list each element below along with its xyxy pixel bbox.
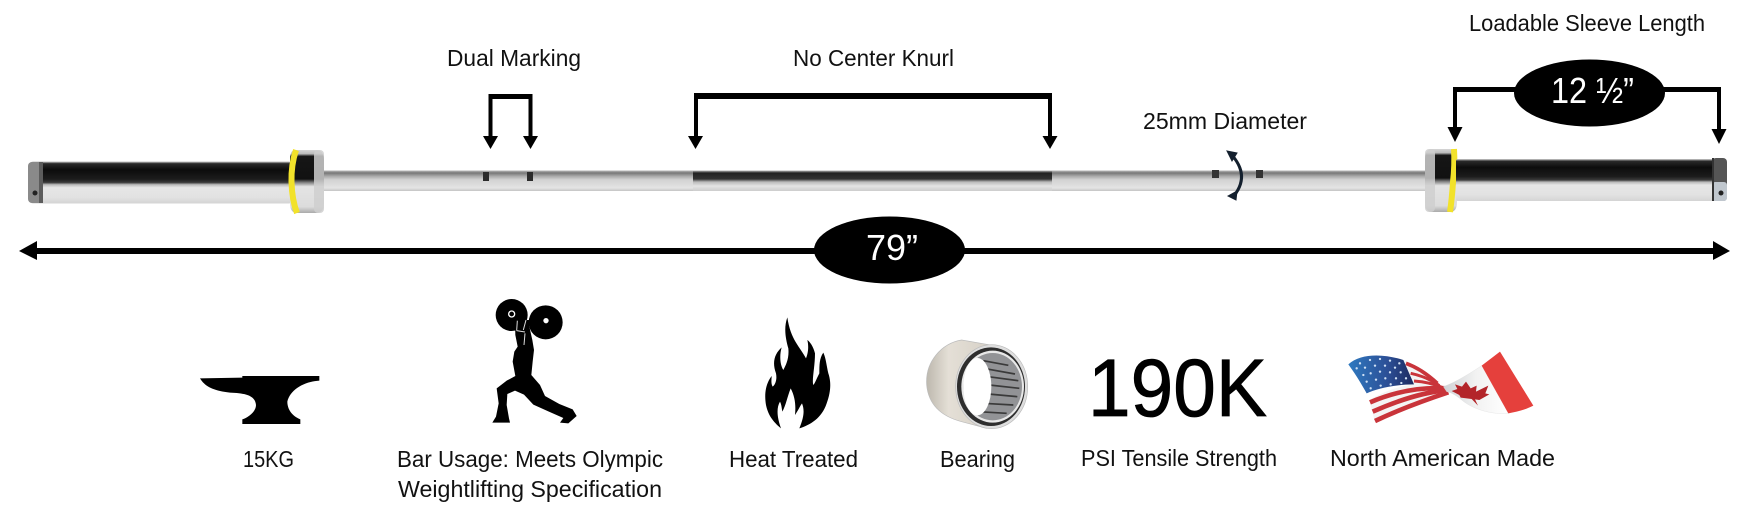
arrows: dual marking bracket bbox=[483, 94, 538, 149]
dual knurl marks left bbox=[483, 172, 533, 181]
left collar bbox=[290, 150, 324, 213]
label: loadable sleeve length: Loadable Sleeve Length bbox=[1469, 10, 1705, 36]
badge: 79 inches bbox=[814, 216, 965, 284]
stat: 190K: 190K bbox=[1088, 343, 1267, 434]
badge: 12 1/2 inches bbox=[1514, 60, 1665, 126]
label: dual marking: Dual Marking bbox=[447, 45, 581, 71]
icon: flame bbox=[765, 317, 830, 428]
left sleeve bbox=[28, 162, 292, 204]
label: no center knurl: No Center Knurl bbox=[793, 45, 954, 71]
centre knurl bbox=[693, 171, 1052, 191]
label: bar usage: Weightlifting Specification bbox=[398, 476, 662, 502]
badge: 79 inches: 79” bbox=[866, 227, 918, 268]
icon: diameter rotation arrow bbox=[1227, 151, 1242, 200]
label: bar usage: Bar Usage: Meets Olympic bbox=[397, 446, 663, 472]
badge: 12 1/2 inches: 12 ½” bbox=[1551, 70, 1634, 111]
shaft bbox=[320, 170, 1430, 191]
icon: anvil bbox=[200, 376, 319, 424]
arrows: sleeve length bracket bbox=[1448, 87, 1726, 144]
dual knurl marks right bbox=[1212, 170, 1263, 178]
barbell bbox=[28, 149, 1727, 213]
right sleeve bbox=[1456, 158, 1727, 201]
label: bar usage bbox=[397, 446, 663, 502]
icon: needle bearing bbox=[927, 340, 1028, 429]
label: bearing: Bearing bbox=[940, 446, 1015, 472]
icon: US and Canadian flags bbox=[1348, 352, 1533, 422]
right collar bbox=[1425, 149, 1457, 212]
label: PSI tensile strength: PSI Tensile Strength bbox=[1081, 445, 1277, 471]
label: heat treated: Heat Treated bbox=[729, 446, 858, 472]
label: north american made: North American Made bbox=[1330, 445, 1555, 471]
arrows: no center knurl bracket bbox=[688, 93, 1058, 149]
label: 25mm diameter: 25mm Diameter bbox=[1143, 108, 1307, 134]
arrow: overall length bbox=[19, 241, 1730, 260]
icon: weightlifter bbox=[492, 299, 577, 423]
label: 15KG: 15KG bbox=[243, 446, 294, 472]
